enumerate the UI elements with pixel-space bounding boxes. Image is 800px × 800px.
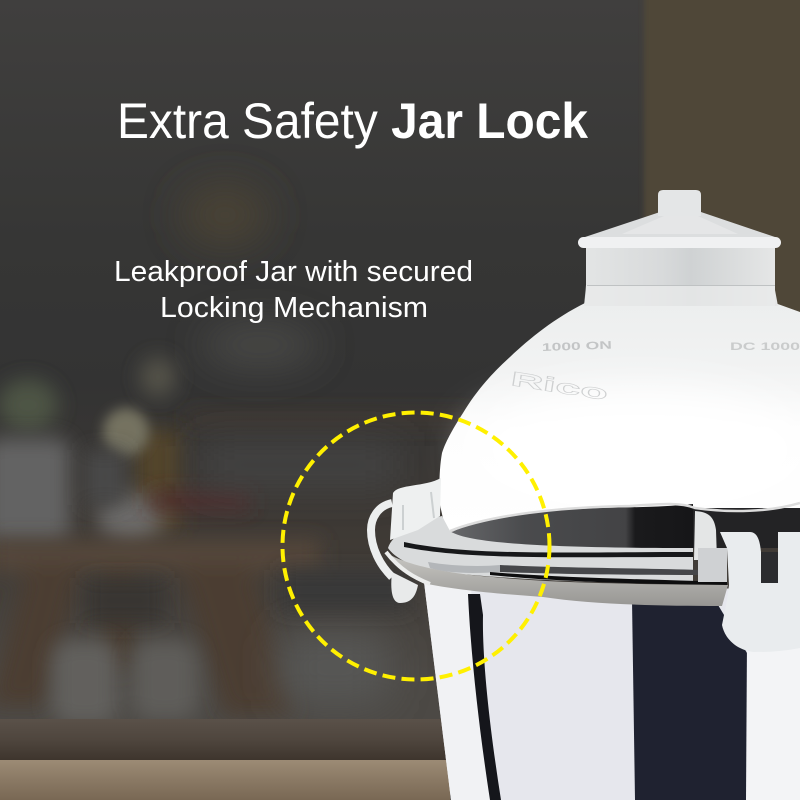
right clip [694,511,800,652]
tabletop front edge [0,760,450,800]
dark reflection panel [632,600,747,800]
grey band behind [200,445,400,485]
description text [114,256,473,324]
jar illustration [371,190,800,800]
lid rim [578,237,781,248]
embossed markings: 1000 ON [542,340,612,354]
clear lid ledge [388,516,693,582]
dark inner band under dome [452,504,693,548]
embossed markings: Rico [509,368,609,405]
dashed yellow highlight circle [282,412,550,680]
steel bucket [424,582,800,800]
soft dome highlight [442,394,476,450]
knob [658,190,701,213]
black seal line [490,572,727,585]
red item [150,492,250,510]
left clip with loop handle [371,478,441,603]
embossed markings: DC 1000 [730,341,800,353]
lid cone [585,212,775,237]
neck [584,248,778,306]
description text: Leakproof Jar with secured [114,256,473,288]
embossed markings [512,341,800,400]
bottle glow [135,430,180,530]
dome [439,303,800,532]
bowls [52,640,118,725]
left white canister [0,438,70,543]
steel band [387,553,728,606]
description text: Locking Mechanism [160,292,428,324]
black reflection strip [468,594,501,800]
plant [0,379,58,431]
wooden table [0,540,320,715]
tabletop back surface [0,719,450,760]
title: Extra Safety Jar Lock [117,93,588,149]
